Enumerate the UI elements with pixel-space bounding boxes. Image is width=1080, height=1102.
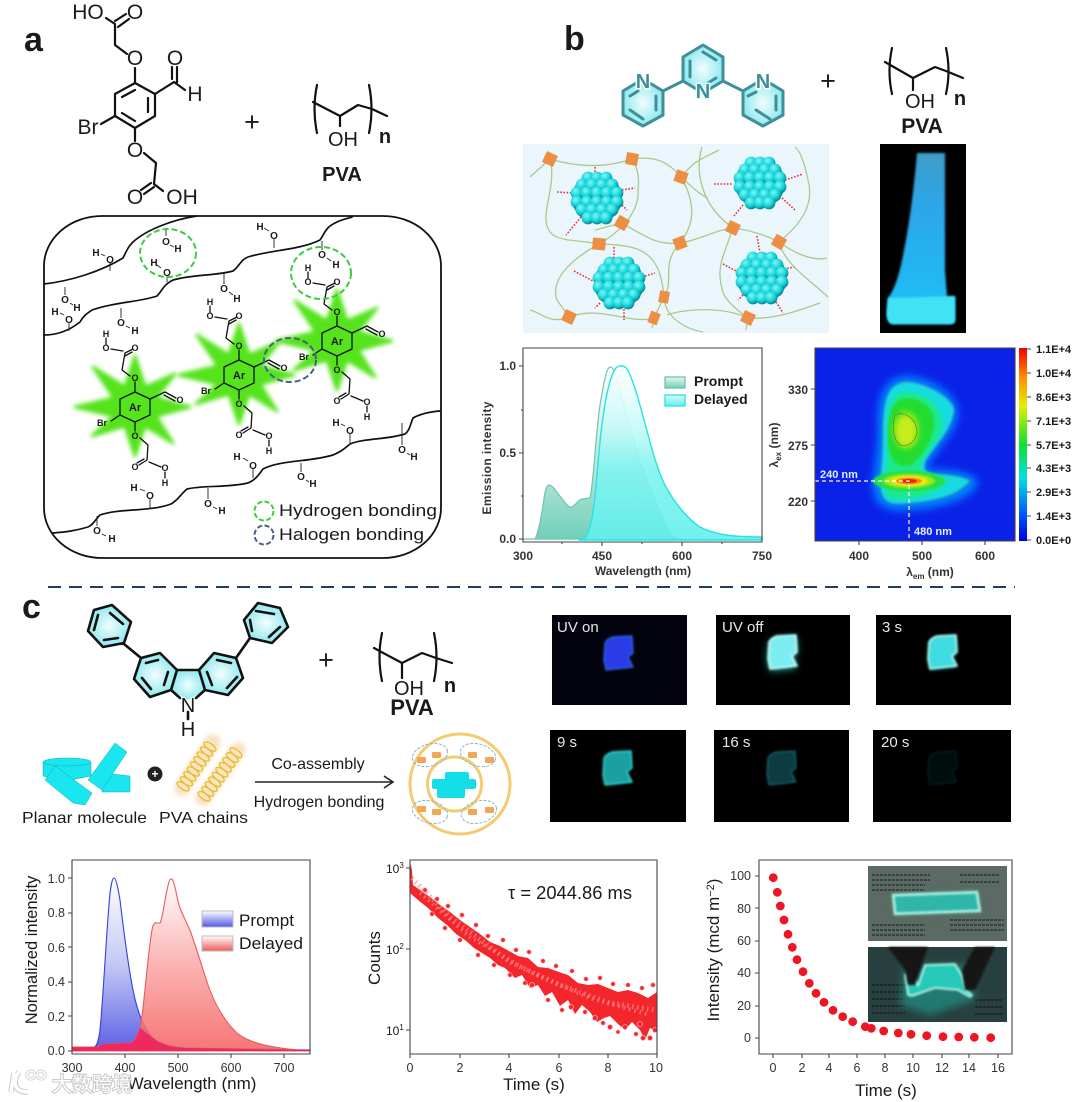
PVA structure: OH [394,678,424,700]
hydroxyl groups: H [309,479,317,490]
glowing molecule 2: Br [201,386,211,396]
y ticks: 220 [788,495,808,509]
x ticks: 2 [799,1061,806,1075]
glowing molecule 2: O [235,399,243,409]
axis title y: (nm) [767,423,781,452]
PVA structure [313,85,391,186]
hydroxyl groups: H [233,294,241,305]
x ticks: 700 [274,1061,294,1075]
glowing molecule 1: Br [97,418,107,428]
label c: c [22,588,41,626]
molecule: bromo aldehyde diacid: O [167,47,183,70]
y ticks: 20 [737,999,751,1013]
x axis ticks: 300 [513,549,533,563]
label: PVA chains: PVA chains [159,810,248,827]
glowing molecule 2: O [235,430,243,440]
photo: 9 s: 9 s [557,734,577,751]
hydroxyl groups: O [93,526,101,537]
x ticks: 12 [935,1061,949,1075]
glowing molecule 3: O [363,397,371,407]
hydroxyl groups [51,222,418,545]
hydroxyl groups: O [117,318,125,329]
nitrogen labels: N [636,71,650,93]
molecule: bromo aldehyde diacid [72,1,203,209]
photo: UV on: UV on [557,619,599,636]
photo: 3 s [876,615,1011,705]
x ticks: 400 [115,1061,135,1075]
y axis ticks [499,359,516,546]
PVA structure: PVA [390,695,434,720]
glowing molecule 1: H [162,478,168,488]
label b: b [564,20,585,58]
chart: emission spectra [480,348,772,578]
colour bar: 8.6E+3 [1036,392,1071,404]
hydroxyl groups: O [163,268,171,279]
y ticks: 80 [737,902,751,916]
dashed section divider [48,586,1015,588]
glowing molecule 1: H [103,329,109,339]
chart: decay curve [365,860,663,1094]
icon: plus dot: + [151,767,159,781]
y ticks: 3 [399,861,404,870]
PVA structure: n [954,88,966,110]
molecule: bromo aldehyde diacid: O [127,47,143,70]
legend [202,911,303,953]
legend: bonding types: Halogen bonding [279,525,424,544]
glowing molecule 2: Ar [233,370,246,382]
y ticks: 0.0 [48,1044,65,1058]
hydroxyl groups: H [131,326,139,337]
chart: normalized spectra [23,860,310,1093]
glowing molecule 3: O [333,307,341,317]
curve: delayed [72,879,310,1051]
axis title y: ) [704,879,723,884]
legend [665,373,748,407]
glowing molecule 3: H [364,412,370,422]
PVA structure [885,48,966,138]
x ticks: 8 [605,1061,612,1075]
nitrogen labels [636,71,770,103]
icon: co-assembled ring [410,734,510,834]
legend: Prompt [694,373,743,389]
x ticks: 16 [991,1061,1005,1075]
curve: prompt emission [523,367,681,539]
y ticks: 330 [788,383,808,397]
glowing molecule 1: O [131,431,139,441]
legend: Delayed [694,391,748,407]
plus sign: + [820,66,836,96]
hydroxyl groups: H [92,248,100,259]
icon: PVA coil chains [176,740,243,803]
glowing molecule 3: Br [299,352,309,362]
colour bar: 0.0E+0 [1036,535,1071,547]
axes box [519,348,762,546]
legend: bonding types [254,501,437,544]
y axis ticks: 0.5 [499,446,516,460]
colour bar: 1.1E+4 [1036,344,1072,356]
axes [68,860,310,1058]
x ticks: 0 [407,1061,414,1075]
axis title y: Emission intensity [480,401,494,514]
hydroxyl groups: H [332,260,340,271]
colour bar: 2.9E+3 [1036,487,1071,499]
hydroxyl groups: O [398,445,406,456]
x ticks: 600 [975,549,995,563]
hydroxyl groups: H [218,506,226,517]
x ticks [770,1061,1005,1075]
legend: Delayed [239,934,303,953]
glowing molecule 1: O [131,462,139,472]
photo: 20 s [873,730,1011,822]
hydroxyl groups: O [106,255,114,266]
polymer chains [44,216,440,533]
chart: excitation-emission heatmap [767,344,1072,581]
axis title y: −2 [705,884,717,897]
nitrogen labels: N [696,81,710,103]
overlap band [72,1028,310,1051]
molecule: diphenyl carbazole [88,603,288,741]
hydroxyl groups: O [297,472,305,483]
x ticks: 6 [556,1061,563,1075]
y ticks: 2 [399,942,404,951]
hydroxyl groups: O [346,426,354,437]
hydroxyl groups: H [150,258,158,269]
photo: UV off [716,615,850,705]
y ticks: 0.4 [48,975,65,989]
molecule: bromo aldehyde diacid: O [127,139,143,162]
hydroxyl groups: O [249,461,257,472]
photo: 16 s: 16 s [722,734,750,751]
colour bar: 1.4E+3 [1036,511,1071,523]
inset photo: bent film [868,947,1007,1022]
axis title y: Counts [365,931,384,985]
glowing molecule 1: O [102,343,110,353]
molecule: bromo aldehyde diacid: O [127,1,143,24]
glowing molecule 1: O [176,395,184,405]
nitrogen labels: N [756,71,770,93]
glowing molecule 3: O [333,365,341,375]
axis title x: Wavelength (nm) [595,564,691,578]
photo: 20 s: 20 s [881,734,909,751]
glowing molecule 1: O [161,463,169,473]
axis title y: Intensity (mcd m [704,897,723,1021]
arrow: co-assembly [255,776,393,788]
axes [406,860,657,1058]
bonding highlights [140,229,351,382]
molecule: bromo aldehyde diacid: OH [166,186,198,209]
glowing molecule 2: H [266,446,272,456]
y ticks [788,383,808,509]
colour bar: 5.7E+3 [1036,440,1071,452]
hydroxyl groups: H [233,452,241,463]
panel b [480,20,1072,581]
molecule: bromo aldehyde diacid: O [127,186,143,209]
y ticks [730,869,751,1045]
y ticks: 0.8 [48,906,65,920]
glowing molecule 1: O [131,373,139,383]
watermark: 大数跨境 [52,1073,132,1096]
plus sign: + [244,107,260,137]
x ticks: 600 [221,1061,241,1075]
glowing molecule 3: O [333,396,341,406]
axis title y: ex [774,451,783,461]
chart: intensity decay [704,860,1012,1100]
inset photo: flat film [868,866,1007,941]
glowing molecule 3: H [305,263,311,273]
x ticks [849,549,995,563]
hydroxyl groups: O [204,499,212,510]
label: planar molecule: Planar molecule [22,810,147,827]
PVA structure: OH [905,91,935,113]
PVA structure: n [379,126,391,148]
x ticks: 2 [457,1061,464,1075]
curve: prompt [72,878,310,1051]
hydroxyl groups: H [51,307,59,318]
watermark [11,1071,132,1096]
x ticks: 0 [770,1061,777,1075]
photo: UV on [552,615,687,705]
label a: a [24,21,44,59]
y ticks: 60 [737,934,751,948]
annotation: 240 nm: 240 nm [820,469,858,481]
x ticks: 8 [882,1061,889,1075]
y ticks: 1 [399,1023,404,1032]
hydroxyl groups: O [65,315,73,326]
label: co-assembly: Co-assembly [271,756,365,773]
x ticks: 4 [826,1061,833,1075]
glowing molecule 2: O [206,311,214,321]
molecule: terpyridine [623,45,783,126]
molecule: bromo aldehyde diacid: H [187,83,203,106]
hydroxyl groups: H [332,418,340,429]
axis title x: em [913,572,924,581]
hydroxyl groups: O [270,231,278,242]
colour bar: 1.0E+4 [1036,368,1072,380]
glowing molecule 2: O [280,363,288,373]
y ticks: 10 [386,862,399,876]
photo: UV off: UV off [722,619,764,636]
colour bar: 4.3E+3 [1036,463,1071,475]
y ticks: 10 [386,943,399,957]
heat contours [873,376,978,510]
axes [811,348,1015,545]
axes [755,860,1012,1058]
PVA structure: PVA [901,115,943,138]
icon: plus dot [148,766,162,782]
x ticks: 500 [168,1061,188,1075]
PVA structure: n [444,675,456,697]
glowing molecule 3: Ar [331,336,344,348]
scatter band [410,862,658,1040]
axis title x: λ [906,565,913,579]
schematic box [44,216,441,558]
glowing molecule 1: O [131,343,139,353]
molecule: diphenyl carbazole: N [181,695,195,717]
hydroxyl groups: H [410,452,418,463]
x ticks: 6 [854,1061,861,1075]
y ticks [386,861,404,1038]
glowing molecule 1 [75,329,190,488]
glowing molecule 1: Ar [129,402,142,414]
x axis ticks [513,549,772,563]
y ticks: 40 [737,966,751,980]
hydroxyl groups: H [174,244,182,255]
axis title x: (nm) [924,565,954,579]
glowing molecule 2 [179,297,294,456]
photo: 9 s [550,730,686,822]
x ticks: 300 [62,1061,82,1075]
y axis ticks: 1.0 [499,359,516,373]
colour bar [1019,344,1072,547]
hydroxyl groups: O [61,295,69,306]
hydroxyl groups: H [108,534,116,545]
photo: glowing film [880,144,966,333]
PVA structure: OH [328,129,358,151]
axis title x: Wavelength (nm) [128,1074,256,1093]
icon: planar molecules [43,743,130,805]
glowing molecule 2: H [207,297,213,307]
PVA structure [374,633,456,720]
x ticks [62,1061,294,1075]
annotation: 480 nm: 480 nm [914,526,952,538]
axis title y: λ [767,461,781,467]
x ticks: 14 [962,1061,976,1075]
axis title x: Time (s) [503,1075,565,1094]
y axis ticks: 0.0 [499,532,516,546]
hydroxyl groups: O [162,237,170,248]
nanocluster network diagram [523,144,829,333]
x ticks [407,1061,663,1075]
legend: Prompt [239,911,294,930]
x axis ticks: 600 [672,549,692,563]
y ticks: 275 [788,439,808,453]
glowing molecule 3 [277,263,392,422]
glowing molecule 3: O [378,329,386,339]
molecule: diphenyl carbazole: H [181,719,195,741]
glowing molecule 3: O [304,277,312,287]
hydroxyl groups: O [220,284,228,295]
colour bar: 7.1E+3 [1036,416,1071,428]
y ticks: 100 [730,869,751,883]
data markers [769,873,995,1042]
x ticks: 400 [849,549,869,563]
axis title x: Time (s) [855,1081,917,1100]
molecule: bromo aldehyde diacid: Br [78,116,99,139]
glowing molecule 2: O [265,431,273,441]
hydroxyl groups: H [73,303,81,314]
x ticks: 10 [906,1061,920,1075]
dashed guides [815,481,909,541]
y ticks: 0.6 [48,941,65,955]
y ticks: 0 [744,1031,751,1045]
glowing molecule 2: O [235,341,243,351]
x axis ticks: 750 [752,549,772,563]
PVA structure: PVA [322,164,362,186]
photo: 16 s [714,730,849,822]
label: hydrogen bonding: Hydrogen bonding [254,794,384,811]
molecule: bromo aldehyde diacid: HO [72,1,104,24]
glowing molecule 3: O [333,277,341,287]
hydroxyl groups: H [256,222,264,233]
y ticks: 10 [386,1024,399,1038]
y ticks: 1.0 [48,872,65,886]
axis title y: Normalized intensity [23,875,41,1024]
x ticks: 500 [912,549,932,563]
panel c [22,588,1012,1100]
x ticks: 10 [649,1061,663,1075]
y ticks: 0.2 [48,1010,65,1024]
glowing molecule 2: O [235,311,243,321]
x axis ticks: 450 [592,549,612,563]
plus sign: + [318,645,334,675]
curve: delayed emission [579,366,762,540]
photo: 3 s: 3 s [882,619,902,636]
y ticks [48,872,65,1058]
legend: bonding types: Hydrogen bonding [279,501,437,520]
hydroxyl groups: O [146,491,154,502]
panel a [24,1,441,558]
hydroxyl groups: O [318,250,326,261]
x ticks: 4 [506,1061,513,1075]
hydroxyl groups: H [130,483,138,494]
lifetime annotation: τ = 2044.86 ms [508,883,632,903]
